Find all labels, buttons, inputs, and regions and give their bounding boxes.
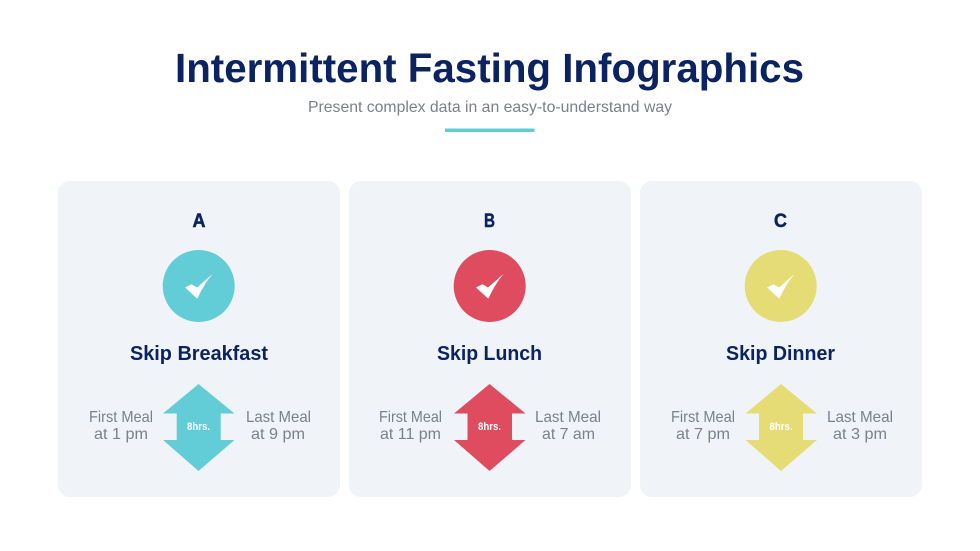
icon: red check circle (454, 250, 526, 322)
double arrow: 8 hours (454, 384, 526, 471)
last meal text: Last Meal (827, 409, 893, 426)
panel letter B: B (484, 211, 495, 232)
last meal text: at 7 am (542, 426, 595, 443)
panel letter A: A (192, 211, 206, 232)
last meal text (827, 409, 893, 443)
first meal text: at 7 pm (676, 426, 730, 443)
double arrow: 8 hours (163, 384, 234, 471)
subtitle: Present complex data in an easy-to-understand way (308, 99, 672, 116)
first meal text: First Meal (379, 409, 442, 426)
first meal text: at 1 pm (94, 426, 148, 443)
last meal text (535, 409, 601, 443)
heading: skip breakfast: Skip Breakfast (130, 343, 268, 365)
first meal text: at 11 pm (380, 426, 441, 443)
double arrow: 8 hours: 8hrs. (187, 421, 210, 433)
first meal text (379, 409, 442, 443)
title: Intermittent Fasting Infographics (175, 45, 804, 91)
last meal text (246, 409, 311, 443)
double arrow: 8 hours: 8hrs. (770, 421, 792, 433)
last meal text: at 9 pm (251, 426, 305, 443)
first meal text (671, 409, 735, 443)
icon: teal check circle (163, 250, 235, 322)
panel letter C: C (774, 211, 787, 232)
double arrow: 8 hours: 8hrs. (478, 421, 501, 433)
heading: skip lunch: Skip Lunch (437, 343, 542, 365)
last meal text: Last Meal (246, 409, 311, 426)
accent underline (445, 128, 534, 132)
heading: skip dinner: Skip Dinner (726, 343, 835, 365)
first meal text: First Meal (671, 409, 735, 426)
last meal text: at 3 pm (833, 426, 887, 443)
first meal text: First Meal (89, 409, 153, 426)
panel: skip breakfast (58, 181, 340, 497)
last meal text: Last Meal (535, 409, 601, 426)
panel: skip dinner (640, 181, 922, 497)
icon: yellow check circle (745, 250, 817, 322)
first meal text (89, 409, 153, 443)
double arrow: 8 hours (746, 384, 817, 471)
panel: skip lunch (349, 181, 631, 497)
